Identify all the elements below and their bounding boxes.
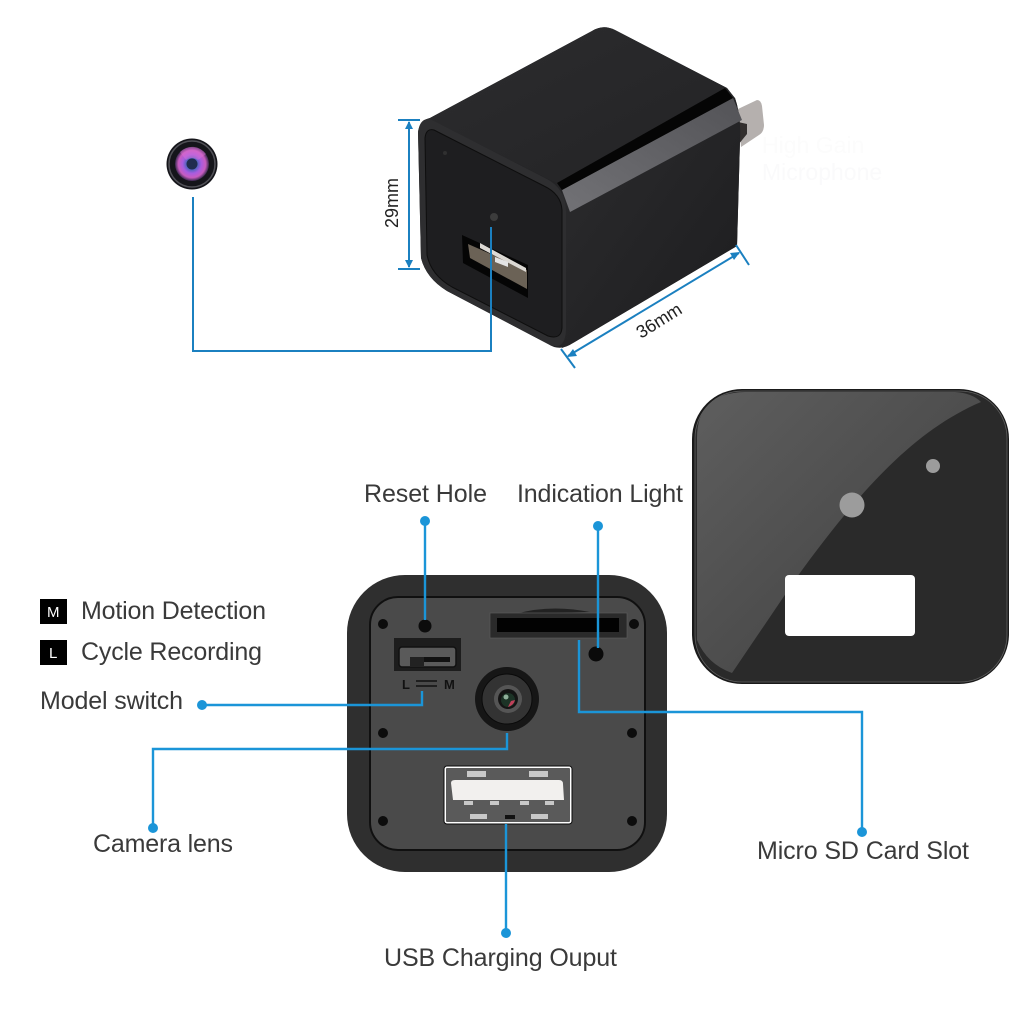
plug shadow [738, 122, 747, 145]
panel: glossy front cover [692, 389, 1009, 684]
label: micro sd card slot: Micro SD Card Slot [757, 837, 969, 865]
indicator dot [490, 213, 498, 221]
legend: cycle recording: L [49, 645, 57, 662]
label: reset hole: Reset Hole [364, 480, 487, 508]
camera lens module [475, 667, 539, 731]
front face [418, 119, 566, 346]
black strip [557, 88, 733, 190]
plug prong [738, 100, 764, 147]
screw holes [378, 619, 639, 826]
leader: indication light [593, 521, 603, 648]
dimension: 36mm [561, 245, 749, 368]
leader: reset hole [420, 516, 430, 620]
usb port [462, 235, 528, 298]
usb cutout [785, 575, 915, 636]
led hole [926, 459, 940, 473]
lens hole [840, 492, 864, 518]
gloss strip [562, 98, 742, 212]
label: model switch: Model switch [40, 687, 183, 715]
indicator hole [588, 646, 604, 662]
reset hole [418, 620, 432, 632]
mode switch: L [402, 677, 410, 692]
gloss reflection [697, 392, 981, 673]
legend: motion detection: Motion Detection [81, 597, 266, 625]
leader: camera lens [148, 733, 507, 833]
dimension: 36mm: 36mm [633, 299, 686, 342]
legend: motion detection: M [47, 604, 60, 621]
label: usb charging output: USB Charging Ouput [384, 944, 617, 972]
product: charger camera 3D view [418, 27, 764, 348]
label: camera lens: Camera lens [93, 830, 233, 858]
dimension: 29mm [382, 120, 420, 269]
mode switch: M [444, 677, 455, 692]
icon: camera lens [166, 138, 218, 190]
leader: lens to charger [193, 197, 491, 351]
leader: micro sd card slot [579, 640, 867, 837]
mode switch [394, 638, 461, 692]
micro sd slot [490, 608, 627, 638]
top face [428, 27, 733, 190]
legend: cycle recording: Cycle Recording [81, 638, 262, 666]
ghost text: high gain microphone: High Gain [762, 132, 864, 158]
silhouette [418, 27, 740, 348]
panel: charger internals [347, 575, 667, 872]
dimension: 29mm: 29mm [382, 178, 402, 228]
leader: model switch [197, 691, 422, 710]
leader: usb charging output [501, 824, 511, 938]
label: indication light: Indication Light [517, 480, 683, 508]
ghost text: high gain microphone: Microphone [762, 159, 882, 185]
usb port [444, 766, 572, 824]
right face [562, 98, 740, 348]
ghost text: high gain microphone [762, 132, 882, 185]
